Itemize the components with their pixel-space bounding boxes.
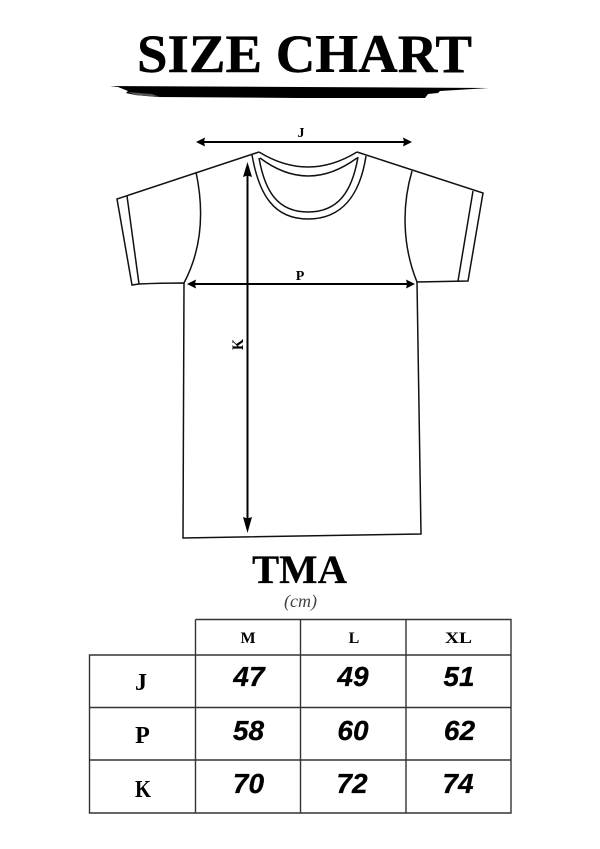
- t-shirt diagram: [117, 152, 483, 538]
- row K: [135, 768, 474, 803]
- row P: 62: [444, 715, 475, 746]
- row P: P: [135, 723, 150, 749]
- front collar outer: [252, 155, 366, 219]
- row J: [135, 661, 475, 696]
- front collar inner: [259, 157, 358, 212]
- left sleeve band: [127, 196, 139, 284]
- column headers: L: [349, 630, 359, 647]
- right armhole: [405, 171, 417, 282]
- unit: (cm): [284, 591, 317, 612]
- arrow P: [187, 280, 415, 288]
- row J: 49: [336, 661, 369, 692]
- row P: 60: [337, 715, 369, 746]
- row K: 70: [233, 768, 264, 799]
- column headers: [240, 630, 472, 647]
- row K: 72: [336, 768, 368, 799]
- column headers: XL: [445, 630, 472, 647]
- arrow J: [196, 138, 412, 146]
- row K: K: [135, 777, 151, 803]
- row J: 51: [443, 661, 475, 692]
- brush stroke underline: [110, 86, 489, 98]
- row P: [135, 715, 475, 749]
- label J: J: [298, 126, 304, 141]
- row P: 58: [233, 715, 264, 746]
- right sleeve band: [458, 191, 473, 281]
- left armhole: [184, 172, 201, 283]
- size table: [90, 620, 511, 813]
- arrow K: [243, 162, 252, 533]
- row J: 47: [232, 661, 266, 692]
- model name: TMA: [252, 547, 347, 592]
- title: SIZE CHART: [137, 24, 472, 84]
- label K: K: [230, 339, 247, 350]
- row J: J: [135, 670, 147, 696]
- label P: P: [296, 269, 305, 284]
- shirt outline: [117, 152, 483, 538]
- column headers: M: [240, 630, 256, 647]
- back neck lines: [259, 152, 357, 176]
- table grid: [90, 620, 511, 813]
- row K: 74: [442, 768, 474, 799]
